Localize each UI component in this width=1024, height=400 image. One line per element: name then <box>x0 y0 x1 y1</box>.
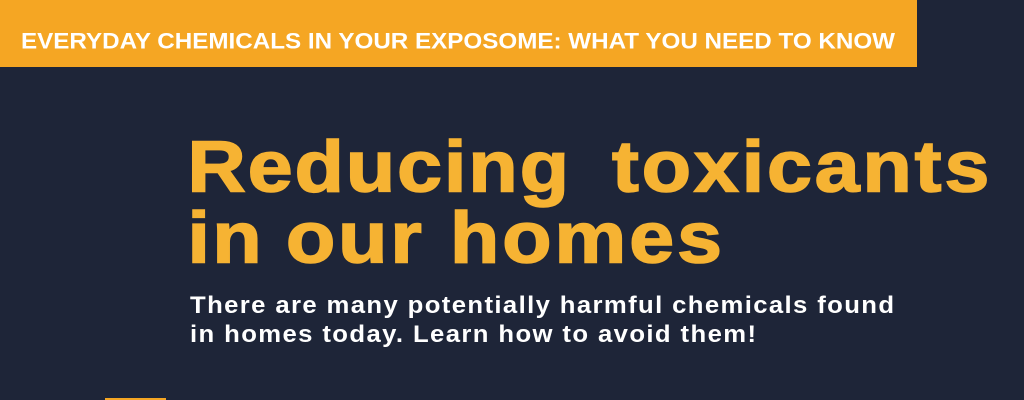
main title <box>188 127 992 279</box>
main title: our <box>286 198 425 279</box>
subtitle <box>190 293 894 348</box>
main title: in <box>188 198 264 279</box>
subtitle: in homes today. Learn how to avoid them! <box>190 322 756 348</box>
subtitle: There are many potentially harmful chemicals found <box>190 293 894 319</box>
main title: toxicants <box>612 127 992 208</box>
main title: homes <box>450 198 725 279</box>
bottom accent bar <box>105 398 166 400</box>
main title: Reducing <box>188 127 571 208</box>
top banner <box>0 0 917 67</box>
banner heading: EVERYDAY CHEMICALS IN YOUR EXPOSOME: WHAT YOU NEED TO KNOW <box>21 28 895 54</box>
